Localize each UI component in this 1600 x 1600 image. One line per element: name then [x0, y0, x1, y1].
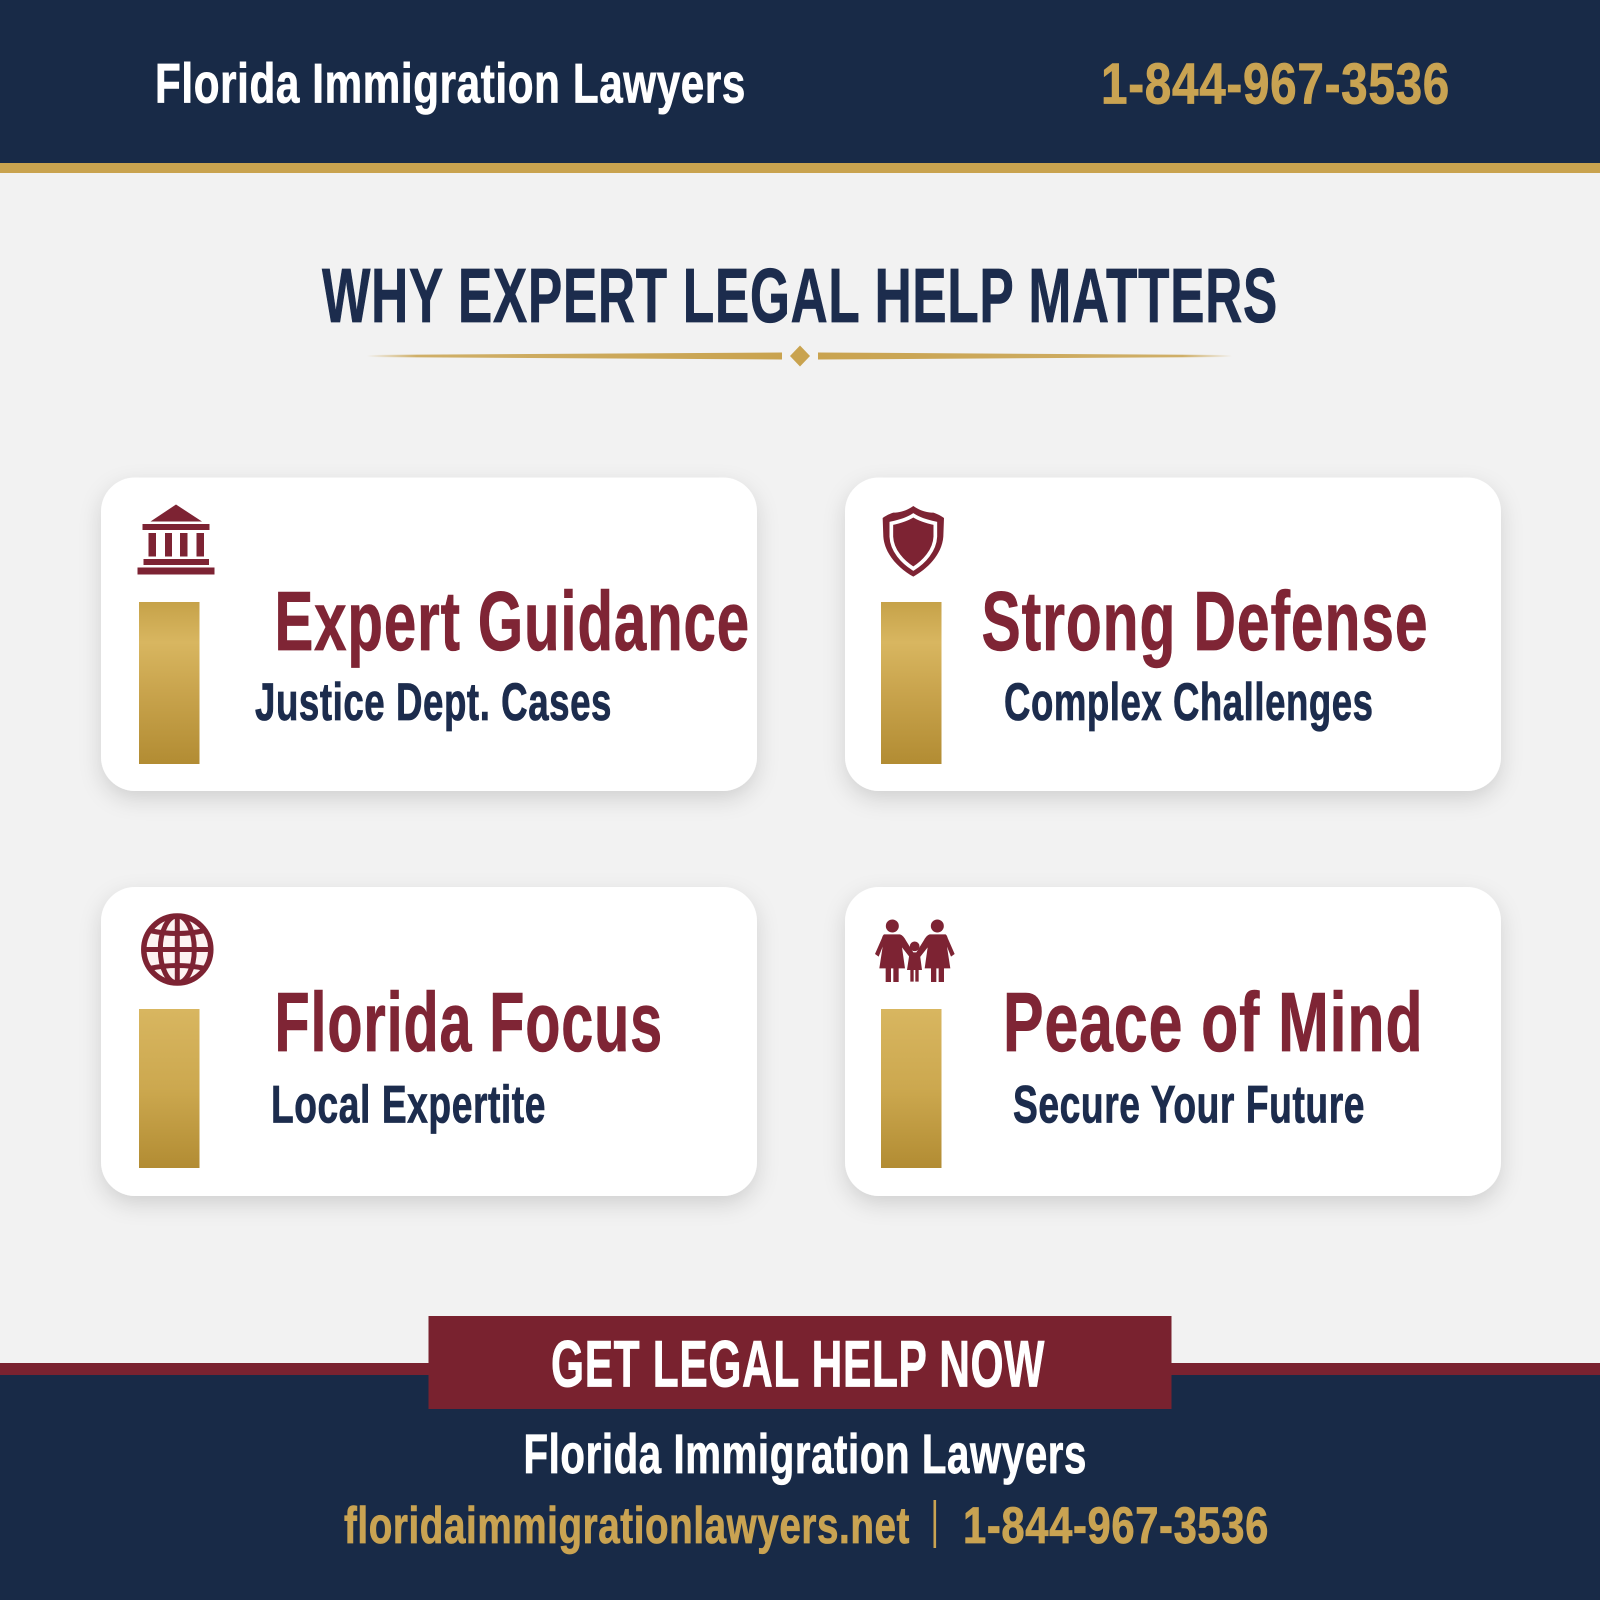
card title: Peace of Mind — [1003, 975, 1424, 1069]
card subtitle: Secure Your Future — [1013, 1076, 1365, 1134]
icon: family — [875, 919, 955, 982]
panel: strong defense — [845, 478, 1501, 791]
gold bar — [139, 602, 200, 764]
heading divider with diamond — [367, 346, 1232, 366]
header phone number: 1-844-967-3536 — [1101, 52, 1450, 116]
footer firm name: Florida Immigration Lawyers — [524, 1423, 1087, 1485]
card subtitle: Justice Dept. Cases — [255, 673, 612, 732]
footer separator — [934, 1500, 936, 1548]
top header band — [0, 0, 1600, 173]
footer website: floridaimmigrationlawyers.net — [344, 1496, 910, 1554]
card subtitle: Complex Challenges — [1004, 673, 1374, 732]
card title: Florida Focus — [274, 975, 663, 1069]
footer phone number: 1-844-967-3536 — [963, 1496, 1269, 1554]
panel: expert guidance — [101, 478, 757, 791]
card title: Expert Guidance — [274, 574, 750, 668]
panel: peace of mind — [845, 887, 1501, 1196]
call to action text: GET LEGAL HELP NOW — [551, 1326, 1045, 1400]
gold bar — [881, 1009, 942, 1168]
footer band — [0, 1316, 1600, 1600]
panel: florida focus — [101, 887, 757, 1196]
icon: globe — [144, 916, 211, 983]
call to action banner — [428, 1316, 1172, 1409]
gold bar — [139, 1009, 200, 1168]
header firm name: Florida Immigration Lawyers — [155, 52, 746, 114]
gold bar — [881, 602, 942, 764]
icon: courthouse — [138, 504, 214, 574]
card subtitle: Local Expertite — [271, 1076, 546, 1134]
icon: shield — [883, 506, 944, 577]
